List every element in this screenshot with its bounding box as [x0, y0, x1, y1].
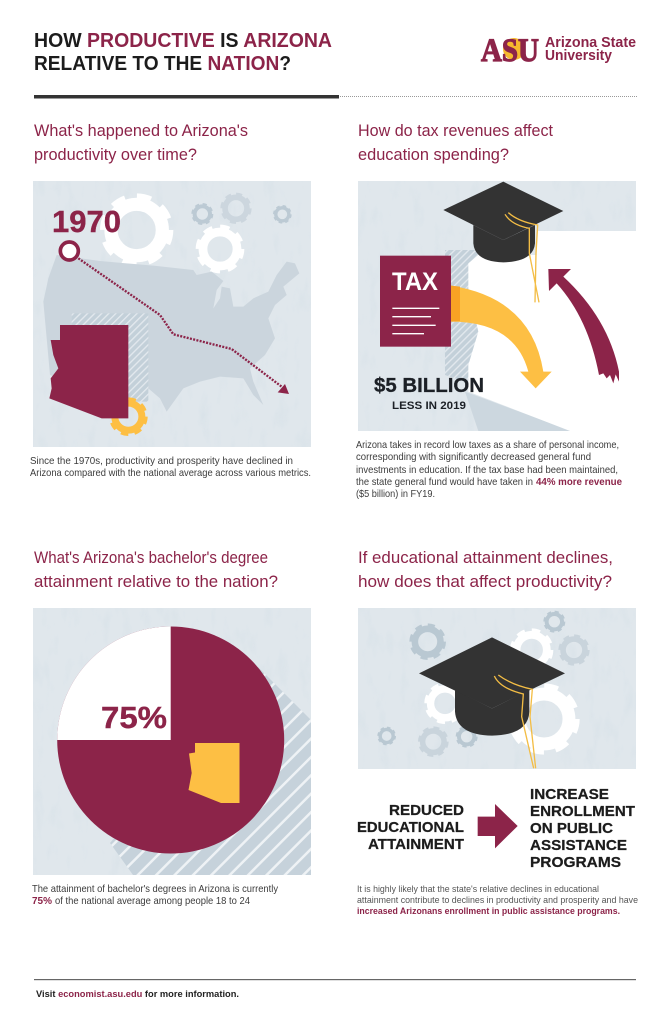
Arizona shape [49, 325, 128, 418]
caption: tax: investments in education. If the tax base had been maintained, [356, 464, 618, 476]
panel: map of productivity decline [33, 181, 311, 447]
Arizona shape [188, 743, 240, 803]
text: reduced educational attainment: EDUCATIONAL [357, 819, 464, 836]
panel: cap and gears [357, 608, 636, 871]
caption: educational attainment: attainment contribute to declines in productivity and prosperity and have [357, 895, 638, 906]
less in 2019: LESS IN 2019 [392, 400, 466, 412]
text: reduced educational attainment: REDUCED [389, 802, 464, 819]
heading: educational attainment: If educational attainment declines, [358, 548, 613, 567]
heading: tax revenues [358, 121, 553, 164]
text: increase enrollment: PROGRAMS [530, 854, 621, 871]
caption: tax: 44% more revenue [536, 476, 622, 488]
yellow gear [111, 399, 146, 434]
text: reduced educational attainment: ATTAINMENT [368, 836, 464, 853]
heading: tax revenues: education spending? [358, 145, 509, 164]
logo: Arizona State University [481, 33, 636, 69]
text: increase enrollment: ON PUBLIC [530, 820, 613, 837]
TAX label: TAX [392, 268, 438, 296]
caption: educational attainment: increased Arizonans enrollment in public assistance programs. [357, 906, 620, 917]
caption: tax: ($5 billion) in FY19. [356, 488, 435, 500]
caption: educational attainment: It is highly likely that the state's relative declines in educational [357, 884, 599, 895]
maroon arrow [548, 269, 619, 383]
label: 1970: 1970 [52, 204, 121, 239]
text: reduced educational attainment [357, 802, 464, 853]
arrowhead [278, 384, 289, 394]
75% label: 75% [101, 700, 167, 735]
graduation cap [443, 182, 563, 302]
logo: Arizona State University: ASU [481, 33, 539, 69]
caption: educational attainment [357, 884, 638, 917]
heading: bachelor's degree: What's Arizona's bachelor's degree [34, 548, 268, 567]
caption: productivity: Since the 1970s, productivity and prosperity have declined in [30, 455, 293, 467]
logo: Arizona State University: Arizona State [545, 34, 636, 51]
caption: tax: corresponding with significantly decreased general fund [356, 451, 591, 463]
caption: productivity: Arizona compared with the national average across various metrics. [30, 467, 311, 479]
gears [104, 194, 291, 271]
heading: productivity over time: productivity over time? [34, 145, 197, 164]
caption: tax: Arizona takes in record low taxes as a share of personal income, [356, 439, 619, 451]
caption: bachelor's degree [32, 883, 279, 907]
text: increase enrollment: ASSISTANCE [530, 837, 627, 854]
hatched square [72, 313, 148, 402]
orange arrow start [451, 286, 460, 322]
white map cutout [468, 231, 636, 432]
text: increase enrollment [530, 786, 635, 871]
caption: bachelor's degree: of the national average among people 18 to 24 [55, 895, 250, 907]
title: HOW PRODUCTIVE IS ARIZONA [34, 30, 332, 52]
heading: bachelor's degree: attainment relative to the nation? [34, 572, 278, 591]
yellow arrow [451, 286, 552, 388]
map of the United States [43, 255, 299, 412]
heading: productivity over time [34, 121, 248, 164]
heading: tax revenues: How do tax revenues affect [358, 121, 553, 140]
footer: Visit economist.asu.edu for more information. [36, 989, 239, 1000]
lower hatched band [465, 392, 572, 431]
start marker [60, 242, 78, 260]
caption: bachelor's degree: 75% [32, 895, 53, 907]
caption: tax: the state general fund would have taken in [356, 476, 533, 488]
heading: educational attainment [358, 548, 613, 591]
white quarter [57, 626, 171, 740]
text: increase enrollment: ENROLLMENT [530, 803, 635, 820]
panel: tax and education [358, 181, 636, 432]
title: RELATIVE TO THE NATION? [34, 53, 291, 75]
text: increase enrollment: INCREASE [530, 786, 609, 803]
heading: bachelor's degree [34, 548, 278, 591]
graduation cap [419, 637, 565, 768]
heading: educational attainment: how does that affect productivity? [358, 572, 612, 591]
caption: bachelor's degree: The attainment of bachelor's degrees in Arizona is currently [32, 883, 279, 895]
hatched shadow [110, 667, 311, 875]
gears [378, 612, 588, 755]
title [34, 30, 332, 75]
pie background [57, 626, 284, 854]
panel: 75 percent pie [33, 608, 311, 875]
caption: productivity [30, 455, 311, 479]
hatched map edge [445, 250, 485, 388]
$5 billion: $5 BILLION [374, 374, 484, 397]
document lines [392, 308, 439, 334]
arrow [478, 804, 518, 848]
caption: tax [356, 439, 622, 500]
logo: Arizona State University: University [545, 47, 613, 64]
dotted decline line [78, 258, 282, 387]
heading: productivity over time: What's happened to Arizona's [34, 121, 248, 140]
TAX document [380, 256, 451, 347]
